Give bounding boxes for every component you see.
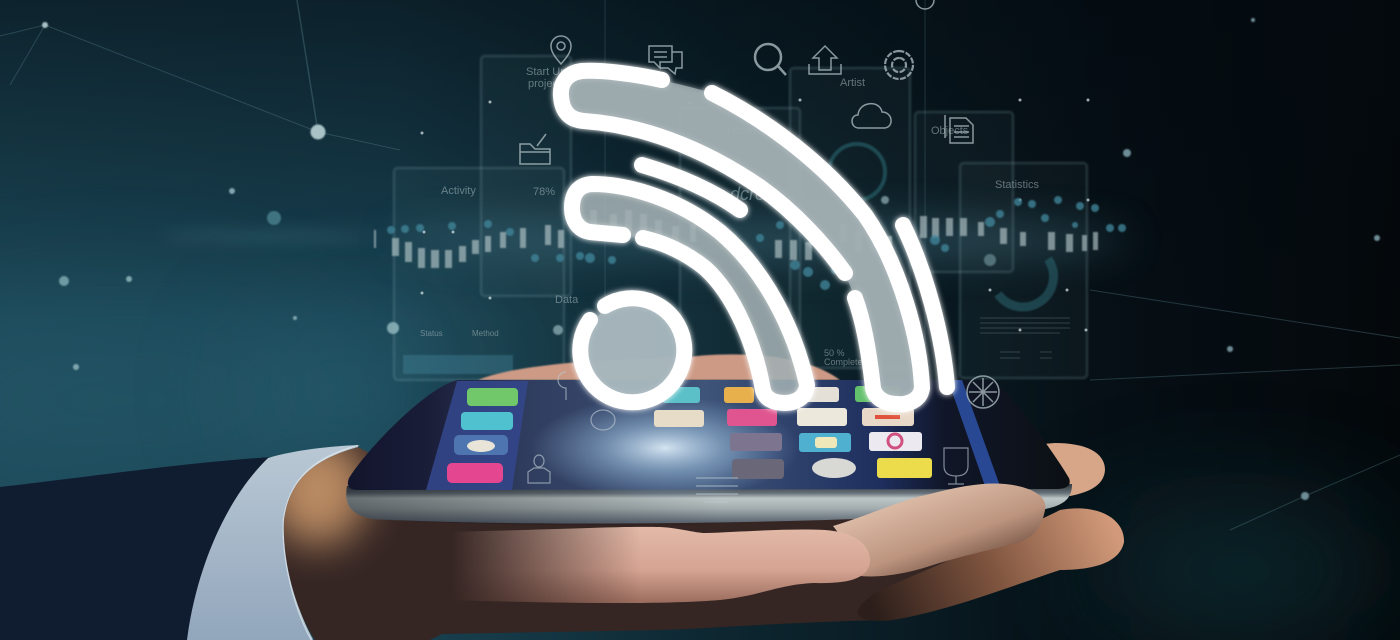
panel labels: Complete bbox=[824, 357, 863, 367]
ring finger bbox=[440, 527, 870, 603]
panel labels: 50 % bbox=[824, 348, 845, 358]
panel: objects bbox=[915, 112, 1013, 272]
panel: statistics bbox=[960, 163, 1087, 378]
icon: cloud bbox=[852, 104, 891, 128]
far arc stripe bbox=[903, 225, 947, 387]
smartphone bbox=[346, 372, 1072, 525]
statistics table lines bbox=[980, 318, 1070, 358]
phone edge shading bbox=[346, 486, 720, 525]
panel: home bbox=[680, 108, 800, 368]
icon: chat bbox=[649, 46, 682, 74]
icon: magnifier bbox=[755, 44, 786, 75]
hand palm bbox=[284, 447, 949, 640]
icon: gear bbox=[885, 51, 913, 79]
small white specks bbox=[420, 98, 1090, 332]
app icons bbox=[447, 386, 932, 483]
panel labels: Method bbox=[472, 329, 499, 338]
outer band fill bbox=[561, 71, 922, 398]
teal ring chart bbox=[829, 144, 885, 200]
panel labels: dcrom bbox=[730, 184, 780, 204]
middle arc, main contour bbox=[572, 184, 807, 403]
icon: location pin bbox=[551, 36, 571, 64]
wifi dot ring bbox=[580, 298, 684, 402]
middle arc, thin stripe bbox=[642, 165, 740, 210]
panel labels bbox=[420, 66, 1040, 367]
statistics donut chart bbox=[998, 259, 1053, 307]
fingertips behind phone top bbox=[478, 354, 840, 380]
middle band fill bbox=[572, 184, 807, 398]
thumb bbox=[833, 483, 1045, 577]
lower finger bbox=[858, 508, 1124, 621]
panel: activity bbox=[394, 168, 564, 380]
form button bbox=[403, 355, 513, 374]
panel labels: Artist bbox=[840, 77, 865, 89]
shirt cuff bbox=[187, 445, 360, 640]
panel labels: Objects bbox=[931, 125, 969, 137]
screen flare bbox=[530, 396, 800, 500]
phone edge bbox=[346, 484, 1072, 523]
outer arc, inner contour bbox=[561, 71, 845, 273]
glowing nodes bbox=[42, 18, 1380, 500]
panel labels: 78% bbox=[533, 186, 555, 198]
panel: artist bbox=[790, 68, 910, 368]
dot fill bbox=[587, 299, 683, 395]
icon: top circle bbox=[916, 0, 934, 9]
panel labels: Home bbox=[727, 125, 756, 137]
translucent interface panels bbox=[394, 56, 1087, 380]
icon: document bbox=[945, 115, 973, 143]
panel labels: Start Up bbox=[526, 66, 566, 78]
floating line icons bbox=[520, 0, 973, 164]
candlestick band bbox=[374, 196, 1126, 290]
wifi symbol bbox=[561, 71, 947, 404]
panel: start up project bbox=[481, 56, 571, 296]
left app panel bbox=[426, 381, 528, 490]
right app edge bbox=[948, 380, 1000, 486]
screen line icons bbox=[528, 372, 968, 502]
outer arc, outer contour bbox=[712, 93, 922, 404]
panel labels: Activity bbox=[441, 185, 476, 197]
icon: upload bbox=[809, 46, 841, 74]
phone screen bbox=[348, 380, 1070, 490]
panel labels: Data bbox=[555, 294, 579, 306]
jacket sleeve bbox=[0, 457, 272, 640]
panel labels: project bbox=[528, 78, 561, 90]
panel labels: Statistics bbox=[995, 179, 1040, 191]
icon: folder bbox=[520, 134, 550, 164]
icon: compass bbox=[967, 376, 999, 408]
panel labels: Status bbox=[420, 329, 443, 338]
top fingertip behind phone bbox=[1030, 443, 1105, 496]
